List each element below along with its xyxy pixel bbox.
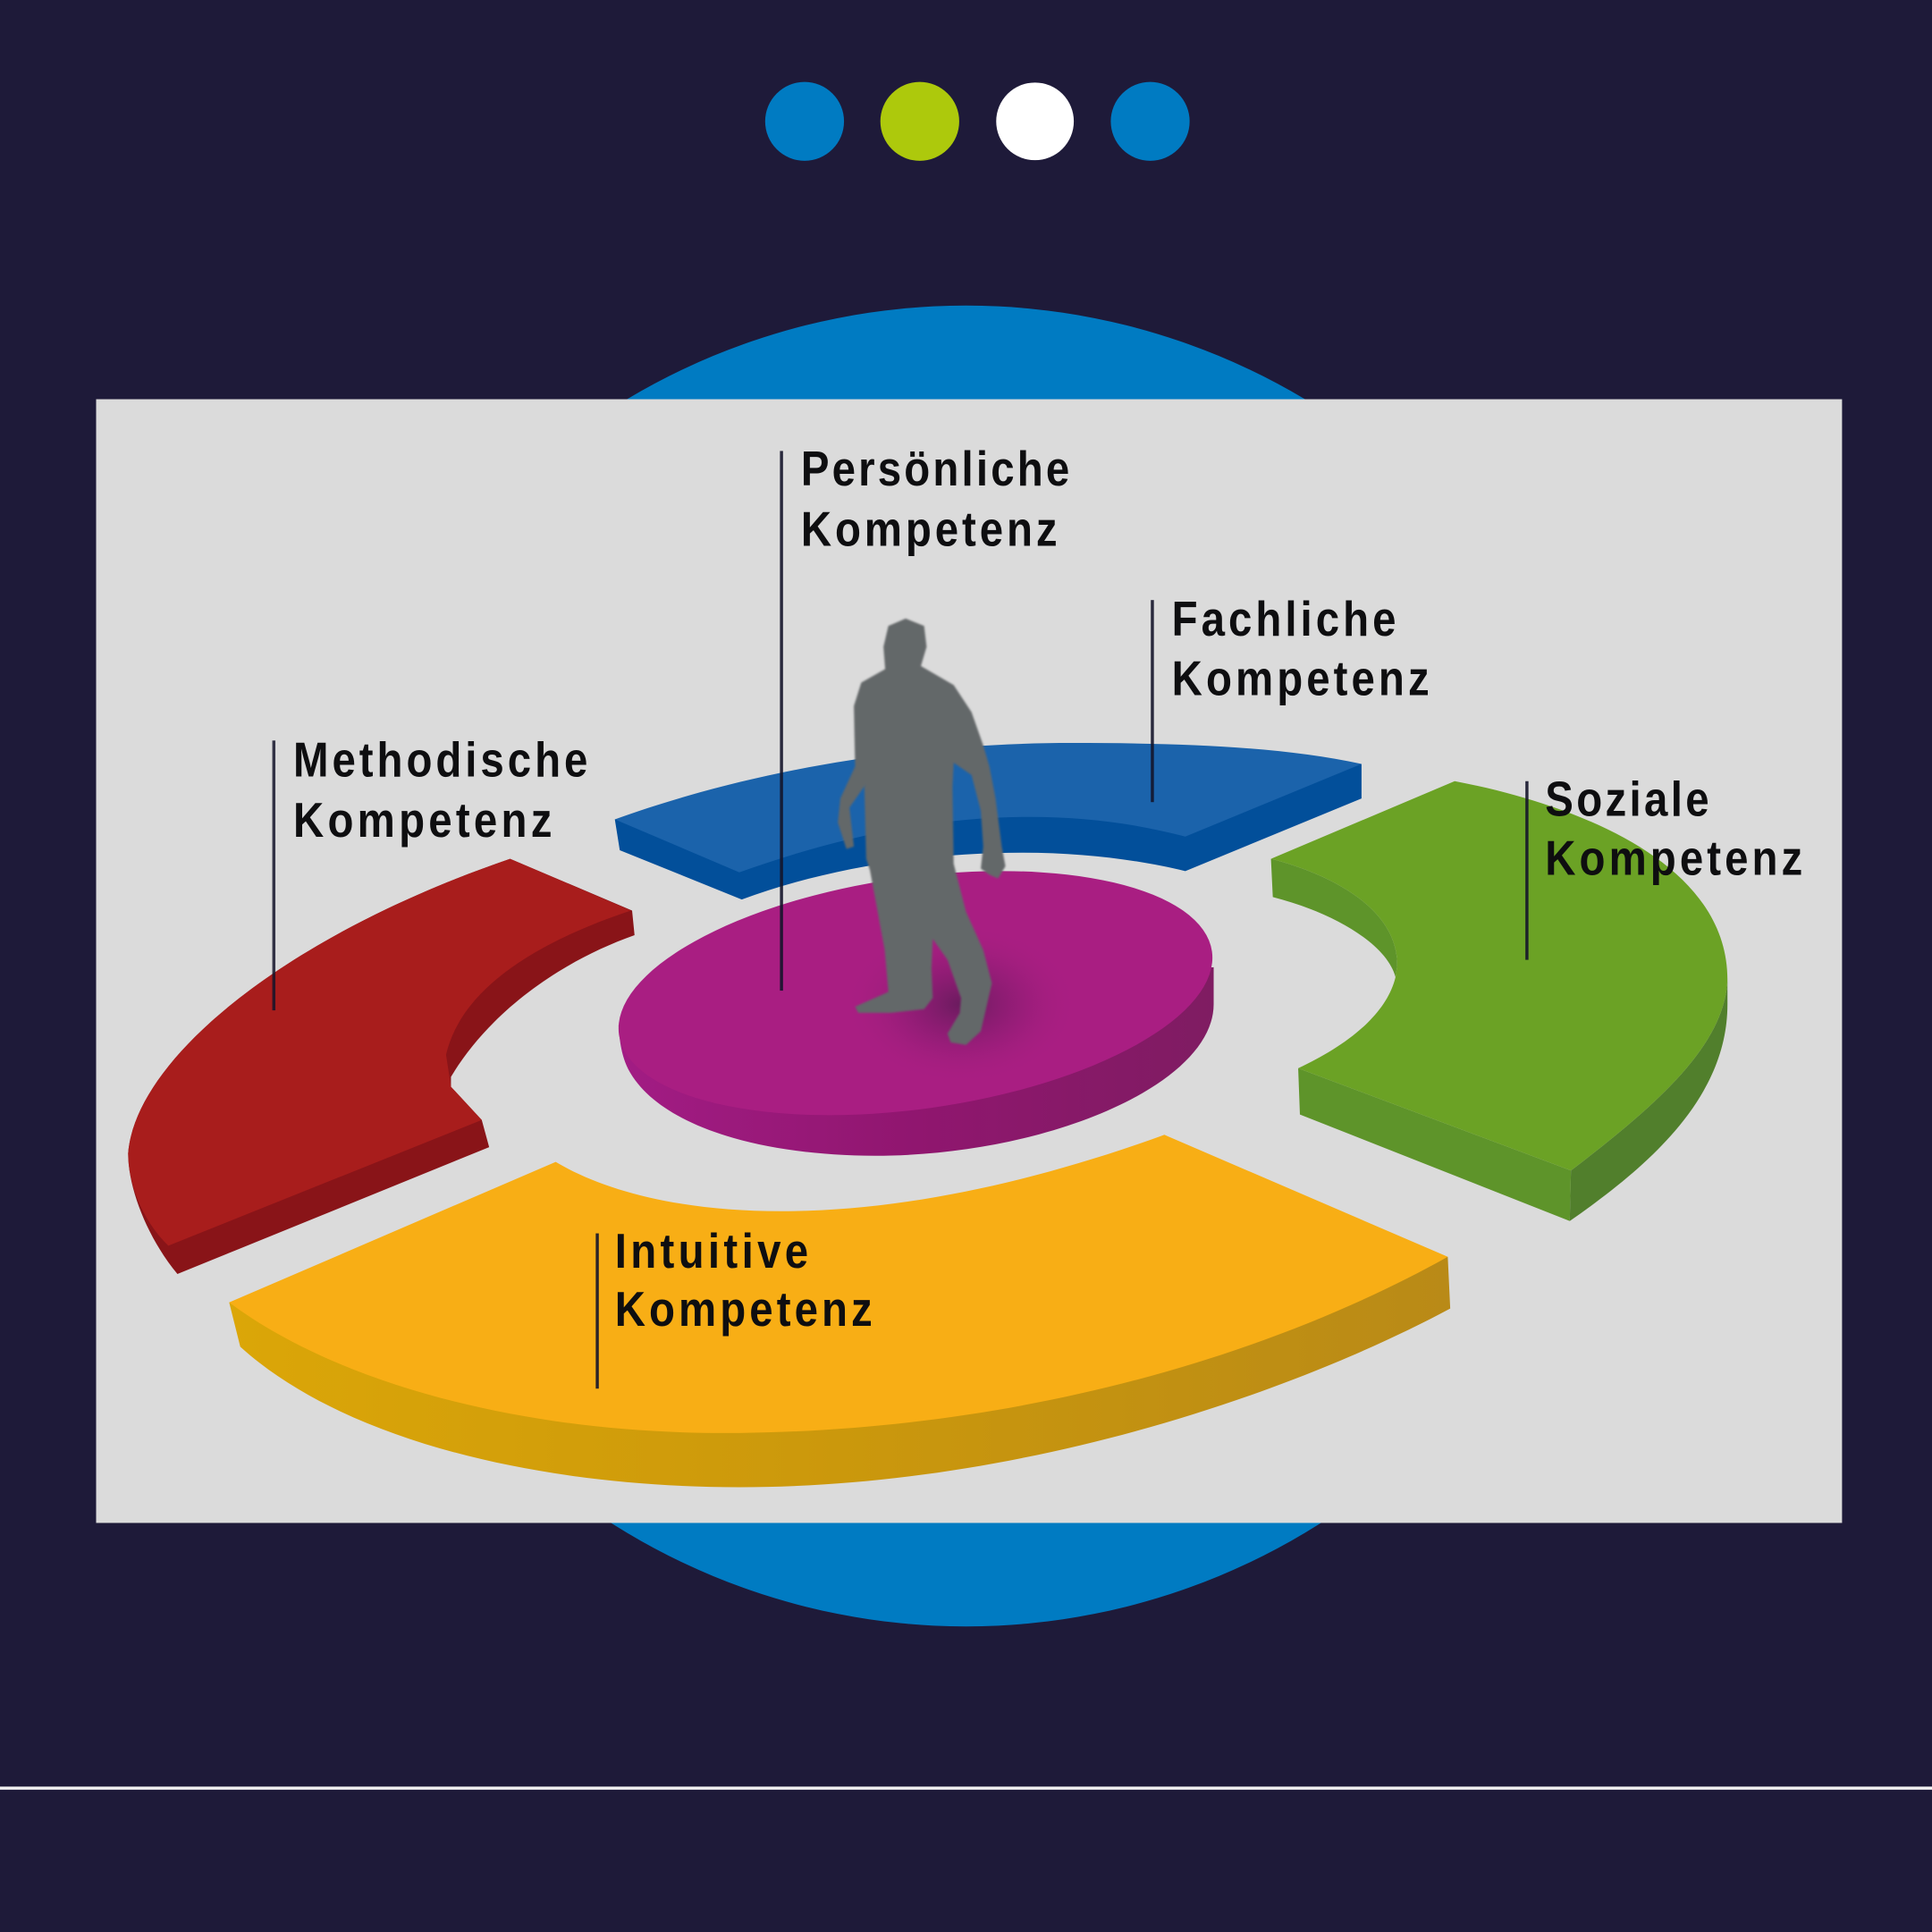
label: Methodische Kompetenz: Kompetenz — [293, 791, 552, 848]
label: Fachliche Kompetenz — [1151, 591, 1430, 802]
segment: red Methodische Kompetenz — [128, 859, 635, 1274]
segment: yellow Intuitive Kompetenz — [229, 1135, 1450, 1487]
label: Fachliche Kompetenz: Fachliche — [1172, 591, 1396, 646]
segment: green Soziale Kompetenz — [1271, 781, 1727, 1221]
footer divider line — [0, 1786, 1932, 1790]
label: Persönliche Kompetenz: Persönliche — [801, 441, 1069, 496]
label: Soziale Kompetenz: Soziale — [1545, 771, 1709, 826]
label: Methodische Kompetenz — [273, 731, 587, 1010]
label: Intuitive Kompetenz — [595, 1223, 873, 1388]
segment: blue Fachliche Kompetenz — [615, 743, 1362, 899]
label: Persönliche Kompetenz — [780, 441, 1069, 991]
panel: competence diagram — [96, 400, 1842, 1523]
label: Soziale Kompetenz — [1525, 771, 1802, 960]
figure: standing person — [838, 619, 1006, 1045]
label: Fachliche Kompetenz: Kompetenz — [1172, 650, 1430, 705]
label: Methodische Kompetenz: Methodische — [293, 731, 587, 787]
label: Soziale Kompetenz: Kompetenz — [1545, 830, 1802, 885]
platform: purple Persönliche Kompetenz — [603, 837, 1228, 1156]
label: Intuitive Kompetenz: Intuitive — [615, 1223, 808, 1278]
label: Intuitive Kompetenz: Kompetenz — [615, 1281, 873, 1337]
label: Persönliche Kompetenz: Kompetenz — [801, 501, 1058, 556]
indicator dots — [765, 82, 1190, 161]
large blue circle — [306, 306, 1626, 1626]
